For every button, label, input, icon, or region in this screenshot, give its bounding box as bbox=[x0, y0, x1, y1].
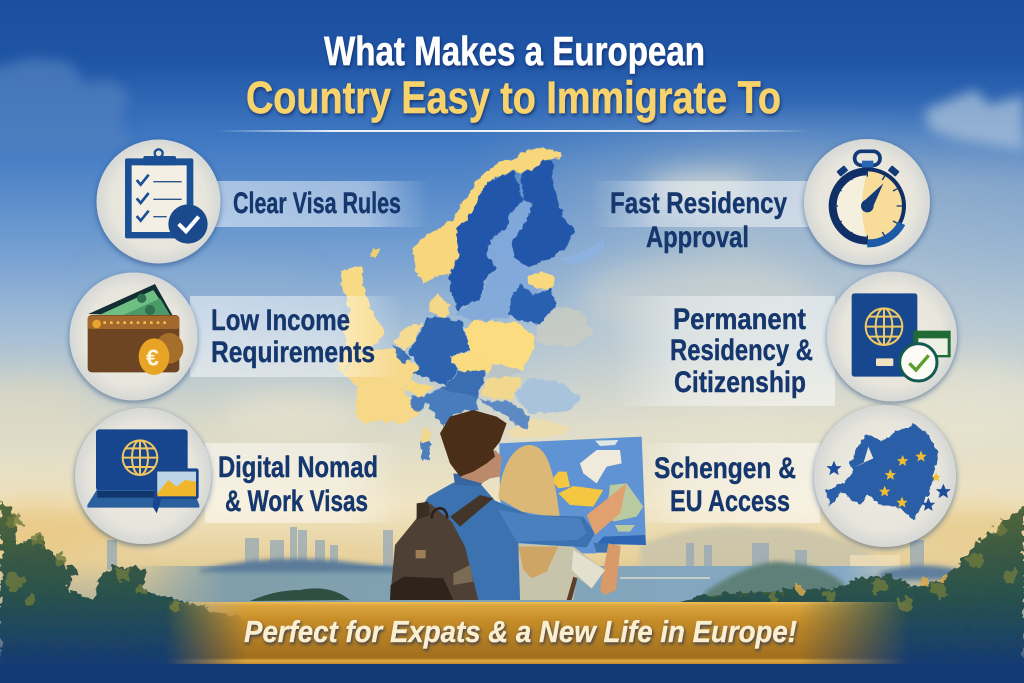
panel: Fast Residency Approval bbox=[610, 139, 930, 265]
label: Approval bbox=[646, 221, 749, 254]
title: Country Easy to Immigrate To bbox=[246, 72, 781, 123]
banner text: Perfect for Expats & a New Life in Europe! bbox=[244, 614, 797, 649]
panel: Permanent Residency and Citizenship bbox=[670, 272, 957, 402]
label: & Work Visas bbox=[225, 485, 368, 518]
France bbox=[335, 348, 420, 425]
band: Low Income Requirements bbox=[190, 296, 405, 377]
band: Digital Nomad and Work Visas bbox=[205, 443, 405, 523]
label: Permanent bbox=[673, 303, 806, 336]
panel: Schengen and EU Access bbox=[654, 405, 956, 547]
banner bbox=[165, 602, 910, 664]
label: Residency & bbox=[670, 334, 813, 367]
Poland bbox=[465, 320, 535, 370]
Estonia bbox=[527, 272, 553, 289]
Balkans bbox=[478, 400, 530, 430]
Corsica and Sardinia bbox=[421, 427, 432, 442]
Sweden bbox=[449, 171, 524, 313]
Germany bbox=[408, 317, 470, 385]
Romania and Ukraine bbox=[513, 378, 581, 414]
band: Schengen and EU Access bbox=[630, 443, 820, 523]
Norway bbox=[413, 147, 561, 284]
Slovakia bbox=[487, 364, 522, 377]
bottom navy band bbox=[0, 664, 1024, 683]
hand-held map bbox=[499, 437, 646, 553]
icon: passport with check bbox=[852, 293, 951, 381]
band: Permanent Residency and Citizenship bbox=[610, 296, 835, 406]
Great Britain bbox=[337, 265, 385, 370]
icon: wallet with euro coin: € bbox=[146, 344, 159, 370]
Switzerland bbox=[405, 380, 435, 397]
couple looking at map bbox=[390, 410, 646, 600]
Finland bbox=[513, 159, 574, 267]
map of Europe bbox=[335, 147, 606, 460]
woman bbox=[498, 445, 621, 600]
Austria bbox=[440, 370, 485, 397]
Bulgaria and Greece bbox=[507, 418, 572, 438]
trees bbox=[0, 500, 1024, 683]
eastern Europe bbox=[537, 307, 593, 347]
distant skyline and water bbox=[107, 526, 960, 602]
icon: laptop, globe and tablet bbox=[87, 429, 199, 513]
label: Citizenship bbox=[674, 366, 806, 399]
gulf of Finland lake bbox=[557, 238, 606, 264]
icon: stopwatch bbox=[833, 151, 902, 243]
label: Digital Nomad bbox=[218, 451, 378, 484]
panel: Low Income Requirements bbox=[70, 272, 375, 400]
label: EU Access bbox=[670, 485, 790, 518]
Czechia bbox=[450, 352, 493, 372]
panel: Clear Visa Rules bbox=[96, 140, 401, 264]
icon: EU map with stars bbox=[825, 423, 951, 520]
Hungary bbox=[480, 377, 523, 400]
icon: wallet with euro coin bbox=[88, 284, 183, 375]
label: Clear Visa Rules bbox=[233, 187, 401, 220]
icon: clipboard bbox=[125, 149, 208, 244]
Baltic sea bbox=[455, 201, 553, 322]
label: Requirements bbox=[211, 336, 375, 369]
panel: Digital Nomad and Work Visas bbox=[75, 408, 378, 544]
label: Low Income bbox=[211, 304, 350, 337]
label: Fast Residency bbox=[610, 187, 787, 220]
Italy bbox=[412, 388, 478, 427]
Benelux bbox=[393, 323, 423, 350]
backpack bbox=[390, 495, 493, 600]
man bbox=[413, 410, 627, 600]
Denmark bbox=[428, 292, 450, 318]
title bbox=[246, 28, 781, 123]
title: What Makes a European bbox=[324, 28, 705, 74]
Latvia and Lithuania bbox=[508, 283, 557, 325]
band: Clear Visa Rules bbox=[215, 181, 430, 227]
band: Fast Residency Approval bbox=[590, 181, 810, 227]
label: Schengen & bbox=[654, 452, 796, 485]
